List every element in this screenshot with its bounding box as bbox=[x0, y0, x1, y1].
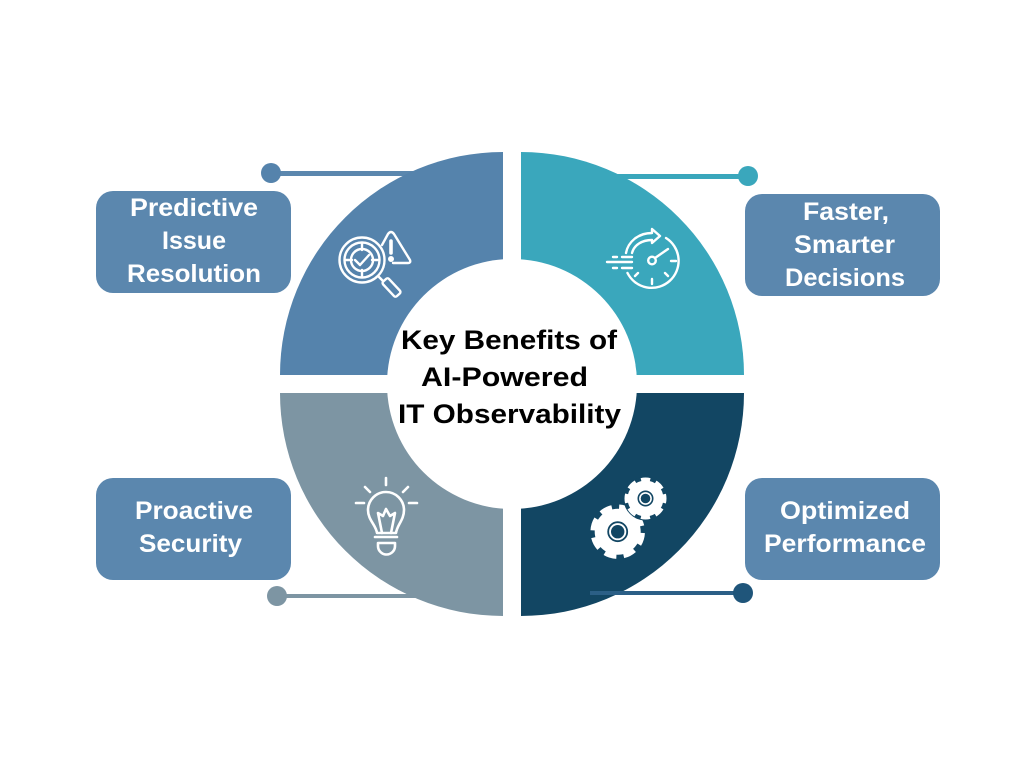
icon: light bulb bbox=[356, 478, 417, 555]
connector: faster smarter decisions bbox=[610, 166, 758, 186]
connector: optimized performance bbox=[590, 583, 753, 603]
label box: proactive security bbox=[96, 478, 291, 580]
label box: faster smarter decisions: Smarter bbox=[794, 231, 895, 259]
label box: faster smarter decisions: Faster, bbox=[803, 198, 889, 226]
connector: predictive issue resolution bbox=[261, 163, 421, 183]
icon: gears bbox=[593, 476, 668, 556]
center title bbox=[398, 325, 621, 429]
icon: magnifier with warning triangle bbox=[340, 232, 410, 298]
ring segment: bottom left bbox=[280, 393, 503, 616]
label box: predictive issue resolution: Resolution bbox=[127, 260, 261, 288]
ring segment: top left bbox=[280, 152, 503, 375]
center title: IT Observability bbox=[398, 399, 621, 429]
label box: faster smarter decisions: Decisions bbox=[785, 264, 905, 292]
center title: Key Benefits of bbox=[401, 325, 618, 355]
center circle bbox=[387, 259, 637, 509]
icon: speedometer with arrow bbox=[607, 229, 679, 288]
label box: predictive issue resolution: Issue bbox=[162, 227, 226, 255]
ring segment: top right bbox=[521, 152, 744, 375]
label box: proactive security: Proactive bbox=[135, 497, 253, 525]
label box: optimized performance bbox=[745, 478, 940, 580]
label box: predictive issue resolution bbox=[96, 191, 291, 293]
label box: faster smarter decisions bbox=[745, 194, 940, 296]
label box: predictive issue resolution: Predictive bbox=[130, 194, 258, 222]
connector: proactive security bbox=[267, 586, 422, 606]
label box: optimized performance: Optimized bbox=[780, 497, 910, 525]
center title: AI-Powered bbox=[421, 362, 588, 392]
label box: proactive security: Security bbox=[139, 530, 242, 558]
label box: optimized performance: Performance bbox=[764, 530, 926, 558]
ring segment: bottom right bbox=[521, 393, 744, 616]
